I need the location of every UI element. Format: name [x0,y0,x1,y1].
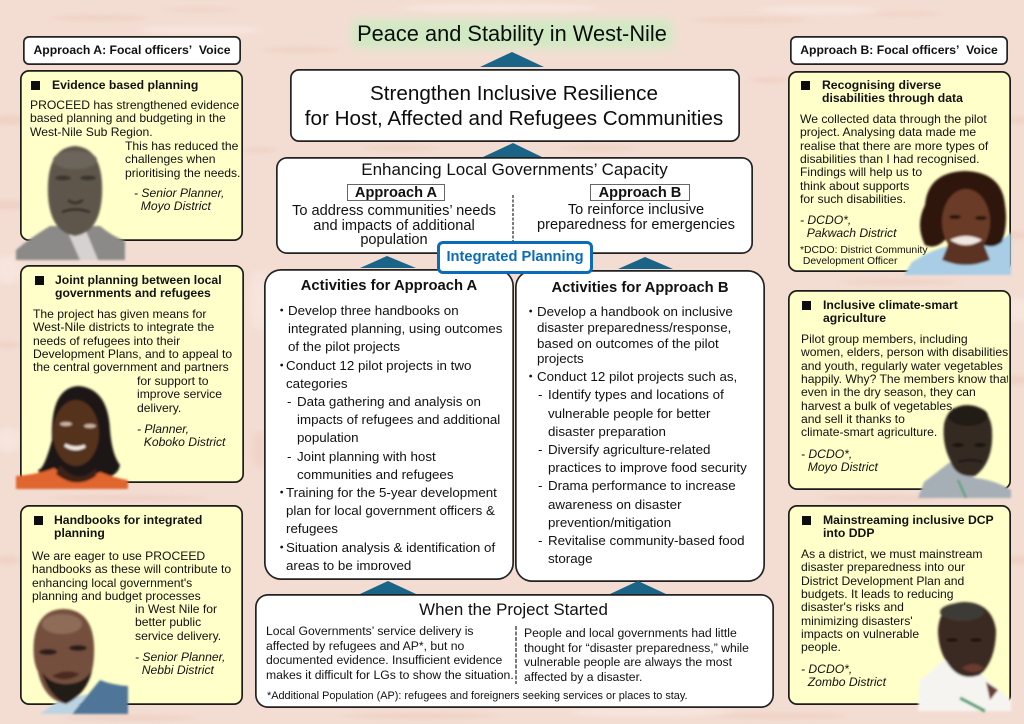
activities A list: ・ [275,540,288,555]
mainstreaming quote: District Development Plan and [801,574,964,588]
capacity heading: Enhancing Local Governments’ Capacity [361,160,668,179]
disabilities quote: think about supports [800,179,909,193]
arrow: start to activities B [610,581,666,594]
joint planning quote continued: delivery. [137,401,181,415]
evidence quote: West-Nile Sub Region. [30,125,153,139]
start right text: People and local governments had little [524,626,737,640]
activities A list: Situation analysis & identification of [286,540,495,555]
activities B list: based on outcomes of the pilot [537,336,719,351]
approach B description [537,202,735,233]
climate quote [801,333,1008,439]
activities B heading: Activities for Approach B [551,280,729,296]
disabilities attribution [800,213,897,240]
joint planning attribution [137,422,226,449]
disabilities quote: realise that there are more types of [800,139,988,153]
handbooks quote continued [135,602,221,643]
icon: portrait DCDO Pakwach [904,169,1012,276]
mainstreaming attribution: - DCDO*, [801,662,852,676]
disabilities quote: for such disabilities. [800,192,906,206]
evidence quote continued [125,139,240,180]
approach B description: preparedness for emergencies [537,217,735,233]
start right text: affected by a disaster. [524,670,642,684]
activities B list: - [538,478,542,493]
activities B list: Diversify agriculture-related [548,442,710,457]
bullet square [35,276,44,285]
mainstreaming quote: budgets. It leads to reducing [801,587,954,601]
approach A description: and impacts of additional [313,218,475,234]
activities B list: Identify types and locations of [548,387,724,402]
joint planning quote: the central government and partners [33,360,229,374]
climate quote: and sell it thanks to [801,412,905,426]
activities A list [275,303,502,570]
climate quote: harvest a bulk of vegetables, [801,399,956,413]
arrow: activities B to capacity [618,257,673,269]
joint planning attribution: Koboko District [144,435,225,449]
climate quote: happily. Why? The members know that [801,372,1008,386]
panel: handbooks for integrated planning [20,505,243,705]
evidence quote: PROCEED has strengthened evidence [30,98,239,112]
start left text: makes it difficult for LGs to show the situation. [266,668,514,682]
activities A list: Joint planning with host [297,449,436,464]
panel: goal [290,69,740,142]
activities A list: impacts of refugees and additional [297,412,500,427]
mainstreaming heading: into DDP [823,526,874,540]
activities A list: refugees [286,521,338,536]
activities A list: integrated planning, using outcomes [288,321,502,336]
disabilities quote: Findings will help us to [800,165,922,179]
icon: portrait senior planner Nebbi [32,608,130,716]
title: Peace and Stability in West-Nile [357,21,667,46]
activities B list: Drama performance to increase [548,478,736,493]
panel: when the project started [255,594,774,708]
mainstreaming quote: disaster preparedness into our [801,560,965,574]
footnote: *Additional Population (AP): refugees and foreigners seeking services or places to stay. [267,690,688,702]
bullet square [802,301,811,310]
evidence attribution [134,186,224,213]
evidence quote continued: This has reduced the [125,139,238,153]
climate heading: agriculture [823,311,886,325]
joint planning quote: The project has given means for [33,307,206,321]
panel: joint planning [20,265,244,483]
start right text: thought for “disaster preparedness,” while [524,641,749,655]
disabilities quote [800,112,988,206]
mainstreaming quote: people. [801,640,841,654]
start left text: Local Governments’ service delivery is [266,624,474,638]
disabilities heading: Recognising diverse [822,78,941,92]
evidence quote [30,98,239,139]
heading: approach B voices: Approach B: Focal officers’ Voice [800,43,998,57]
icon: portrait DCDO Zombo [918,600,1013,712]
mainstreaming heading: Mainstreaming inclusive DCP [823,513,994,527]
goal text: Strengthen Inclusive Resilience [370,82,658,105]
panel: enhancing local governments' capacity [276,157,753,254]
heading: approach A voices: Approach A: Focal officers’ Voice [33,43,231,57]
bullet square [802,516,811,525]
activities A list: ・ [275,303,288,318]
icon: portrait DCDO Moyo [917,403,1012,500]
title [348,16,676,52]
mainstreaming quote: minimizing disasters' [801,614,913,628]
climate heading: Inclusive climate-smart [823,298,958,312]
mainstreaming quote: impacts on vulnerable [801,627,919,641]
activities B list: disaster preparedness/response, [537,320,731,335]
activities A list: Training for the 5-year development [286,485,497,500]
DCDO definition: *DCDO: District Community [800,245,928,256]
activities B list: storage [548,551,593,566]
activities B list [524,304,747,566]
handbooks quote: handbooks as these will contribute to [32,562,231,576]
handbooks quote continued: better public [135,615,201,629]
activities B list: - [538,442,542,457]
evidence quote: based planning and budgeting in the [30,111,226,125]
disabilities quote: project. Analysing data made me [800,125,976,139]
climate quote: and youth, regularly water vegetables [801,359,1003,373]
heading: approach B voices [790,36,1008,65]
panel: evidence based planning [20,70,243,241]
handbooks quote: planning and budget processes [32,589,201,603]
joint planning quote: needs of refugees into their [33,334,180,348]
DCDO definition [800,245,928,267]
approach A description: population [360,232,428,248]
disabilities heading [822,78,963,105]
joint planning quote continued [137,374,222,415]
approach B description: To reinforce inclusive [568,202,704,218]
bullet square [34,516,43,525]
arrow: to peace and stability [480,52,544,67]
approach A description: To address communities’ needs [292,203,496,219]
disabilities quote: We collected data through the pilot [800,112,987,126]
activities B list: - [538,387,542,402]
disabilities attribution: - DCDO*, [800,213,851,227]
handbooks attribution: Nebbi District [142,663,214,677]
activities A list: of the pilot projects [288,339,400,354]
evidence quote continued: challenges when [125,152,215,166]
joint planning quote [33,307,232,374]
joint planning heading [55,273,222,300]
joint planning heading: Joint planning between local [55,273,222,287]
mainstreaming quote [801,547,982,654]
handbooks heading: Handbooks for integrated [54,513,202,527]
activities B list: awareness on disaster [548,497,682,512]
activities A list: ・ [275,358,288,373]
callout: integrated planning: Integrated Planning [446,249,584,265]
activities A list: ・ [275,485,288,500]
handbooks heading: planning [54,526,105,540]
panel: activities for approach B [515,270,765,582]
climate quote: women, elders, person with disabilities [801,345,1008,359]
start left text [266,624,514,682]
activities A list: communities and refugees [297,467,454,482]
start left text: affected by refugees and AP*, but no [266,639,464,653]
climate quote: even in the dry season, they can [801,385,976,399]
joint planning attribution: - Planner, [137,422,189,436]
start heading: When the Project Started [419,600,608,619]
evidence quote continued: prioritising the needs. [125,166,240,180]
climate quote: climate-smart agriculture. [801,425,937,439]
activities B list: - [538,533,542,548]
arrow: to goal [483,143,542,157]
activities B list: projects [537,351,584,366]
activities B list: Develop a handbook on inclusive [537,304,733,319]
activities A list: - [287,449,291,464]
activities A list: categories [286,376,348,391]
activities B list: vulnerable people for better [548,406,710,421]
activities A list: plan for local government officers & [286,503,495,518]
panel: activities for approach A [264,269,514,580]
activities B list: practices to improve food security [548,460,747,475]
joint planning quote continued: for support to [137,374,209,388]
activities A list: - [287,394,291,409]
panel: activities for approach B: ・ [524,304,537,319]
activities B list: prevention/mitigation [548,515,671,530]
evidence attribution: - Senior Planner, [134,186,224,200]
activities B list: Revitalise community-based food [548,533,745,548]
mainstreaming attribution [801,662,886,689]
activities A list: population [297,430,359,445]
activities B list: disaster preparation [548,424,666,439]
mainstreaming attribution: Zombo District [808,675,886,689]
activities B list: Conduct 12 pilot projects such as, [537,369,737,384]
handbooks attribution: - Senior Planner, [135,650,225,664]
mainstreaming quote: As a district, we must mainstream [801,547,982,561]
joint planning heading: governments and refugees [55,286,211,300]
start right text [524,626,749,684]
evidence attribution: Moyo District [141,199,211,213]
DCDO definition: Development Officer [803,256,897,267]
approach B label: Approach B [599,185,681,201]
activities A list: Data gathering and analysis on [297,394,481,409]
climate attribution [801,447,878,474]
start left text: documented evidence. Insufficient evidence [266,653,502,667]
climate heading [823,298,958,325]
joint planning quote: Development Plans, and to appeal to [33,347,232,361]
goal text: for Host, Affected and Refugees Communities [305,107,723,130]
callout: integrated planning [437,241,593,274]
arrow: activities A to capacity [360,256,416,268]
climate attribution: Moyo District [808,460,878,474]
mainstreaming heading [823,513,994,540]
activities A list: Develop three handbooks on [288,303,459,318]
handbooks quote: We are eager to use PROCEED [32,549,205,563]
arrow: start to activities A [360,581,416,594]
icon: portrait planner Koboko [14,384,130,491]
disabilities quote: disabilities than I had recognised. [800,152,980,166]
icon: portrait senior planner Moyo [14,144,126,262]
climate attribution: - DCDO*, [801,447,852,461]
approach A description [292,203,496,248]
approach A label: Approach A [355,185,437,201]
goal text [305,82,723,130]
handbooks quote continued: in West Nile for [135,602,217,616]
panel: activities for approach B: ・ [524,369,537,384]
activities A heading: Activities for Approach A [301,278,477,294]
heading: approach A voices [23,36,241,65]
handbooks attribution [135,650,225,677]
panel: mainstreaming inclusive DCP [788,505,1011,705]
disabilities heading: disabilities through data [822,91,963,105]
joint planning quote: West-Nile districts to integrate the [33,320,214,334]
mainstreaming quote: disaster's risks and [801,600,904,614]
handbooks quote [32,549,231,603]
panel: recognising diverse disabilities [788,71,1011,272]
handbooks quote continued: service delivery. [135,629,221,643]
joint planning quote continued: improve service [137,387,222,401]
start right text: vulnerable people are always the most [524,655,732,669]
bullet square [801,81,810,90]
activities A list: Conduct 12 pilot projects in two [286,358,471,373]
handbooks quote: enhancing local government's [32,576,192,590]
panel: inclusive climate-smart agriculture [788,290,1011,490]
disabilities attribution: Pakwach District [807,226,896,240]
evidence heading: Evidence based planning [52,78,198,92]
handbooks heading [54,513,202,540]
bullet square [31,81,40,90]
